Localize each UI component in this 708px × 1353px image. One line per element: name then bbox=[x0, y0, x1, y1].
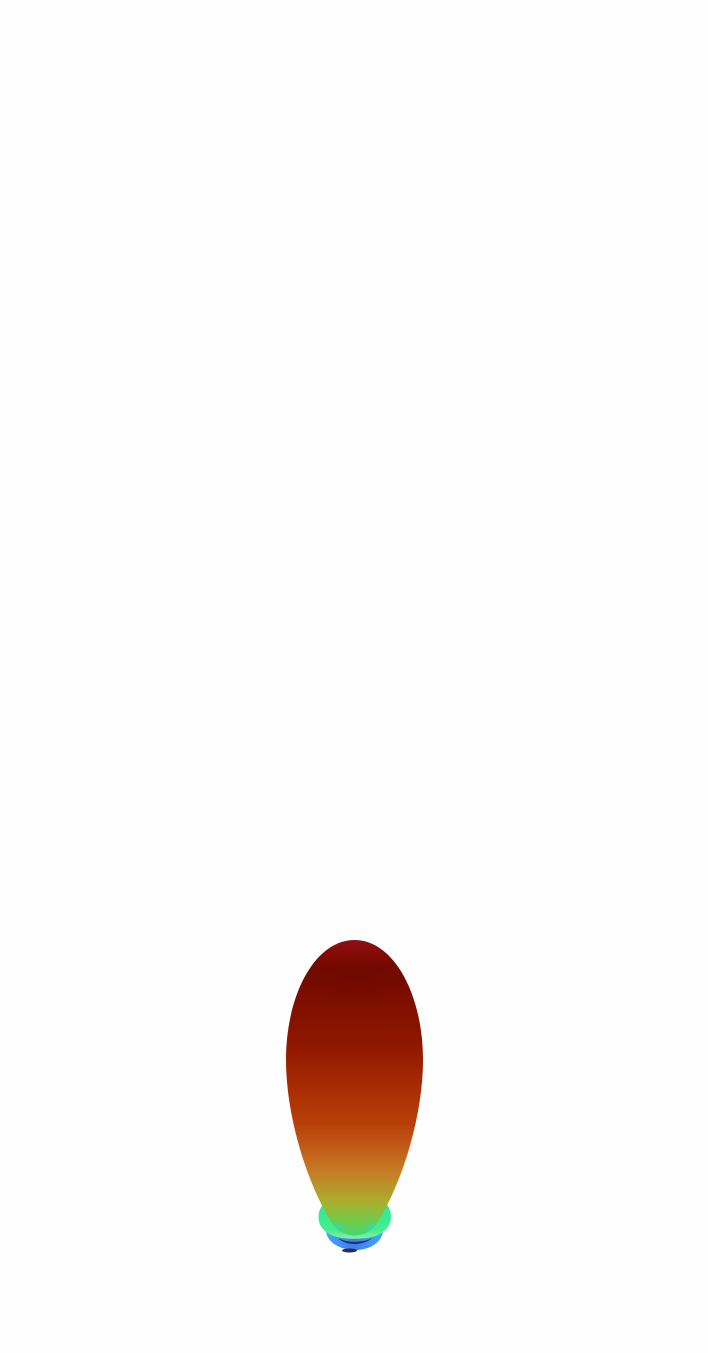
icon: dark bottom lobe bbox=[342, 1248, 357, 1252]
icon: lower blue side lobe bbox=[326, 1231, 383, 1250]
icon: main radiation lobe bbox=[286, 940, 423, 1236]
icon: green side lobe bowl bbox=[318, 1203, 391, 1239]
icon: dark inner arc bbox=[338, 1238, 372, 1244]
